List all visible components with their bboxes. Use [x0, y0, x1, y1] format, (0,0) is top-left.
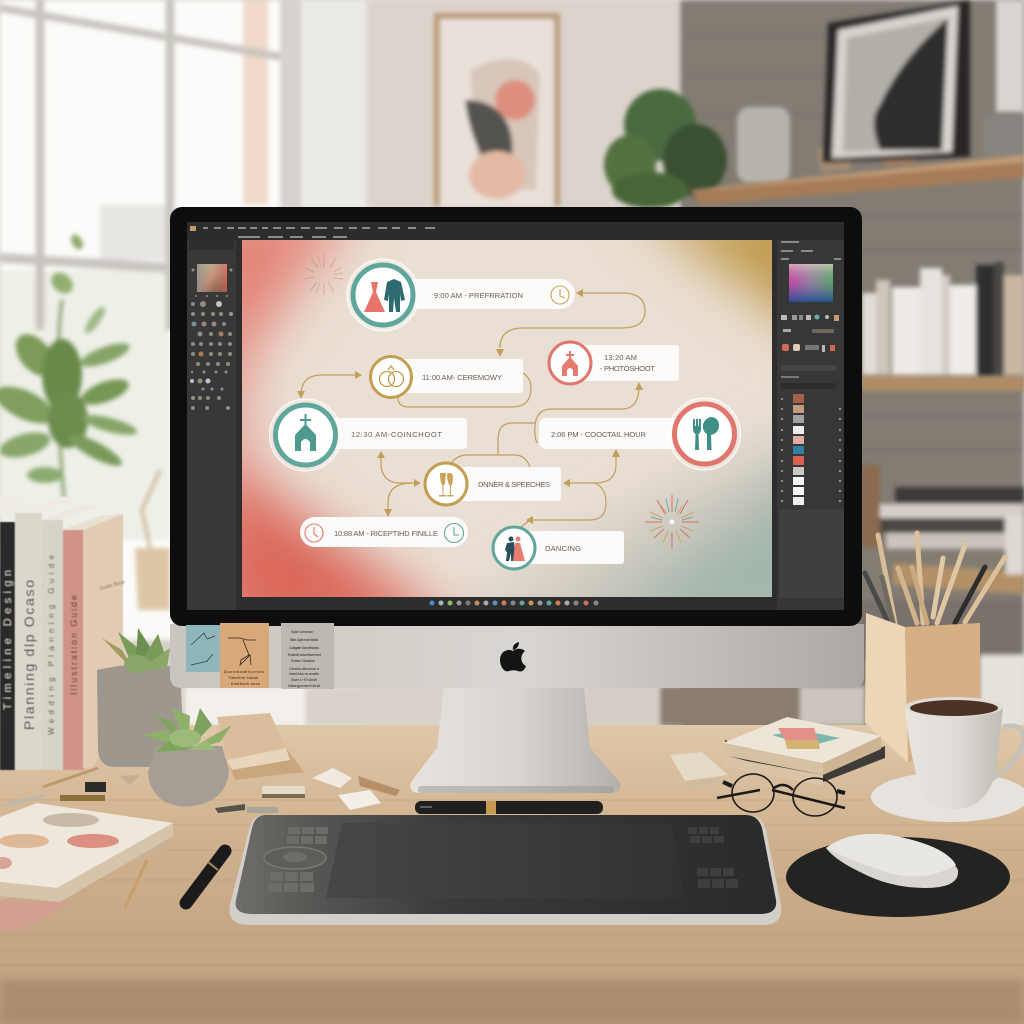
- artboard margin strip: [236, 240, 777, 610]
- framed art print: [434, 13, 560, 206]
- colour picker: [789, 264, 833, 302]
- sticky note: grey memo: Geneil a alemance a: [289, 667, 320, 671]
- step: 10:88 AM reception finale: [300, 517, 468, 547]
- arrowheads: [297, 289, 643, 524]
- books on shelf: [862, 262, 1024, 575]
- left stack of books: Illustration Guide: [69, 595, 79, 695]
- canvas: gradient artboard: [242, 240, 772, 597]
- step: 13:20 AM photoshoot: [549, 342, 679, 384]
- step: 12:30 AM coinchoot: 12:30 AM-COINCHOOT: [351, 430, 442, 439]
- sketchbook with swatches: [0, 803, 173, 930]
- succulent in small pot: [144, 708, 232, 807]
- sticky note: grey memo: Klaer L+R Kleurit: [291, 678, 318, 682]
- sticky note: grey memo: Karel 2da me amarts: [289, 672, 319, 676]
- background potted plant: [604, 89, 727, 208]
- notebooks with sticky tabs: [670, 717, 885, 786]
- sticky note: grey memo: Kjaer Amstran: [291, 630, 313, 634]
- pen: [186, 851, 225, 903]
- notepad stack behind small pot: [217, 713, 304, 780]
- left stack of books: Planning dlp Ocaso: [21, 580, 37, 730]
- menu bar: [187, 222, 844, 240]
- desk: [0, 725, 1024, 1024]
- sticky note: blue: [186, 625, 220, 672]
- sticky tabs: [772, 728, 840, 749]
- step: 9:00 AM preparation: 9:00 AM - PREFRRATION: [434, 291, 523, 300]
- icon: dancing couple: [505, 536, 525, 561]
- tablet active area: [326, 823, 684, 898]
- left stack of books: Guide Book: [99, 579, 126, 592]
- icon: champagne glasses: [439, 473, 454, 496]
- step: 12:30 AM coinchoot: [270, 399, 467, 471]
- sticky note: grey memo: [281, 623, 334, 689]
- connector arrows: [301, 293, 645, 527]
- step: 11:00 AM ceremony: [370, 356, 523, 398]
- left stack of books: Timeline Design: [2, 570, 14, 710]
- left tools panel: [187, 240, 236, 610]
- layer thumbnails: [781, 394, 841, 505]
- graphics tablet: [229, 815, 781, 925]
- icon: apple logo: [500, 642, 526, 671]
- saucer and coffee cup: [871, 697, 1024, 822]
- step: 13:20 AM photoshoot: 13:20 AM: [604, 353, 637, 362]
- left plant: [0, 233, 139, 498]
- taskbar dock: [430, 600, 598, 606]
- tablet buttons: [264, 827, 738, 892]
- sticky note: grey memo: Entisel. Kibalche: [291, 659, 315, 663]
- icon: clock left: [305, 524, 323, 542]
- shelf objects: vase and pots: [737, 107, 1024, 183]
- sticky note: orange: : Kinetisch ones: [228, 681, 260, 686]
- step: 2:06 PM cocktail hour: 2:06 PM - COOCTAIL HOUR: [551, 430, 647, 439]
- colour picker: [197, 264, 227, 292]
- icon: fork and spoon: [693, 417, 720, 450]
- wooden shelves: [690, 155, 1024, 594]
- monitor bezel: [170, 207, 862, 626]
- sticky note: grey memo: Bike Light man Basit: [290, 638, 319, 642]
- monitor chin: [170, 624, 864, 688]
- small scraps on desk: [5, 768, 400, 813]
- step: dinner and speeches: DNNER & SPEECHES: [478, 480, 550, 489]
- stylus pen: [415, 801, 603, 814]
- firework: bottom right: [645, 495, 699, 548]
- sticky note: orange: Timeline ideas: [228, 675, 258, 680]
- sticky note: orange: Dunnmodelvornes: [224, 669, 264, 674]
- mouse: [826, 834, 958, 888]
- sticky note: orange: [220, 623, 269, 688]
- left stack of books: Wedding Planning Guide: [47, 554, 56, 735]
- sticky note: grey memo: Mikangpenten Kleurit: [288, 684, 321, 688]
- step: 11:00 AM ceremony: 11:00 AM- CEREMOWY: [422, 373, 502, 382]
- mouse pad: [786, 837, 1010, 917]
- step: dinner and speeches: [425, 463, 561, 505]
- glasses: [717, 774, 845, 816]
- pencil holder: [865, 533, 1005, 763]
- step: 9:00 AM preparation: [347, 259, 575, 331]
- monitor stand: [410, 688, 620, 793]
- editor app window: [187, 222, 844, 610]
- left stack of books: [0, 494, 126, 770]
- right properties panel: [777, 240, 844, 598]
- sticky note: grey memo: Golfgate Kameriands: [289, 646, 319, 650]
- back succulent planter: [97, 628, 183, 767]
- blurred window-sill pot: [135, 470, 170, 610]
- step: 13:20 AM photoshoot: - PHOTOSHOOT: [600, 364, 655, 373]
- sticky note: grey memo: Thaterid advertisement: [287, 653, 322, 657]
- step: 2:06 PM cocktail hour: [539, 398, 740, 470]
- pencil on desk: [125, 860, 147, 908]
- framed black picture: [823, 0, 1024, 162]
- background: room wall: [0, 0, 1024, 730]
- icon: clock right: [444, 524, 464, 542]
- icon: dress and suit: [364, 279, 405, 312]
- icon: chapel small: [562, 351, 578, 376]
- step: 10:88 AM reception finale: 10:88 AM - RICEPTIHD FINILLE: [334, 529, 438, 538]
- icon: clock: [551, 286, 569, 304]
- monitor: [170, 200, 864, 793]
- icon: chapel: [295, 414, 316, 451]
- firework: top left: [305, 254, 343, 295]
- step: dancing: DANCING: [545, 544, 581, 553]
- window with panes: [0, 0, 300, 640]
- step: dancing: [493, 527, 624, 569]
- strip of room behind the monitor: [185, 686, 865, 726]
- icon: wedding rings: [380, 366, 404, 386]
